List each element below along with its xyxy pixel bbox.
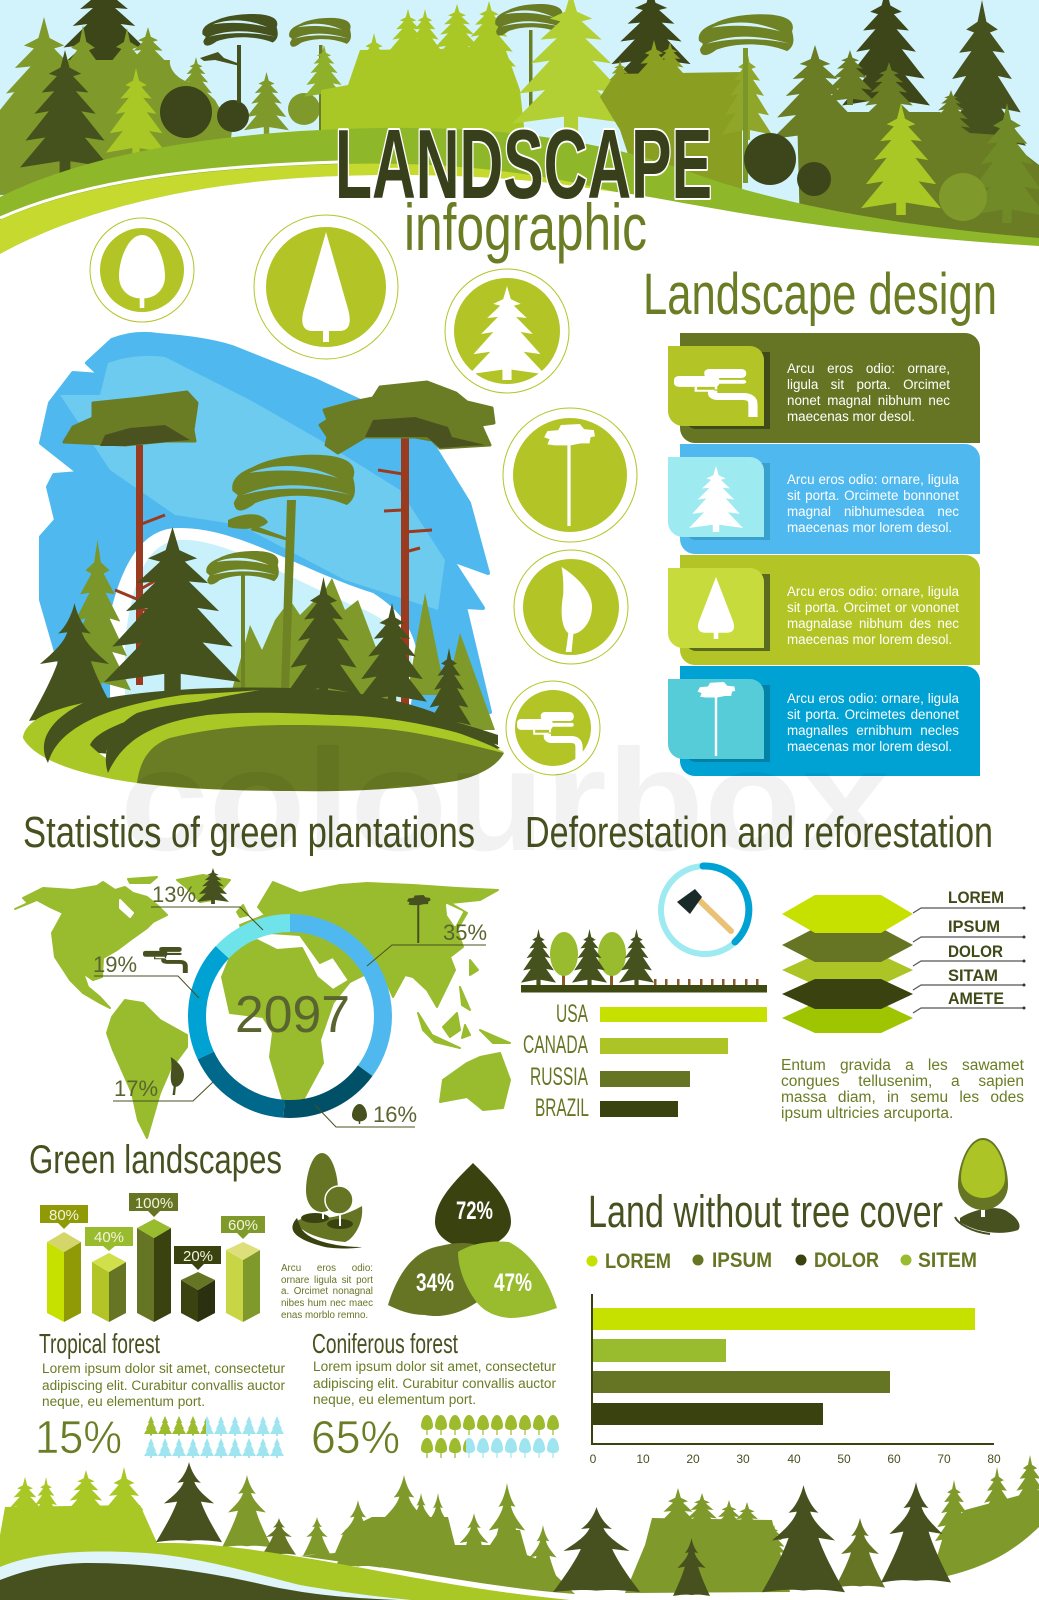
card: bonsai: maecenas mor desol.: [787, 409, 915, 424]
title: [335, 109, 712, 264]
card: bonsai: nonet magnal nibhum nec: [787, 393, 950, 408]
landscape illustration: [23, 334, 504, 791]
card: cone tree: maecenas mor lorem desol.: [787, 632, 952, 647]
card: tall pine: maecenas mor lorem desol.: [787, 739, 952, 754]
small paragraph: nibes hum nec maec: [281, 1298, 373, 1309]
panel: cards: [668, 333, 980, 776]
card: spruce: maecenas mor lorem desol.: [787, 520, 952, 535]
petal chart: 72%: [456, 1197, 493, 1225]
petal chart: 34%: [416, 1269, 454, 1297]
card: tall pine: Arcu eros odio: ornare, ligula: [787, 691, 959, 706]
horizontal bar chart: 60: [887, 1452, 901, 1466]
axe ring: [661, 866, 749, 954]
coniferous forest block: [311, 1328, 559, 1463]
hexagon stack: LOREM: [948, 888, 1004, 907]
country bar chart: CANADA: [523, 1031, 588, 1059]
country bar chart: [523, 1000, 767, 1122]
horizontal bar chart: 80: [987, 1452, 1001, 1466]
small paragraph: [281, 1263, 373, 1325]
country bar chart: RUSSIA: [530, 1063, 588, 1091]
donut callouts: 19%: [93, 952, 137, 977]
header forest scene: [0, 0, 1039, 300]
ground: [35, 687, 500, 763]
donut callouts: [93, 868, 487, 1127]
card: spruce: sit porta. Orcimete bonnonet: [787, 488, 959, 503]
small paragraph: enas morblo remno.: [281, 1310, 368, 1321]
foreground spruces: [104, 527, 241, 692]
donut callouts: 13%: [152, 882, 196, 907]
card: spruce: [668, 444, 980, 554]
heading: green landscapes: Green landscapes: [29, 1138, 282, 1182]
card: cone tree: Arcu eros odio: ornare, ligula: [787, 584, 959, 599]
horizontal bar chart: 20: [686, 1452, 700, 1466]
bar 40%: [85, 1227, 133, 1322]
footer forest scene: [0, 1455, 1039, 1600]
green hill: [0, 128, 1039, 262]
coniferous forest block: 65%: [311, 1411, 400, 1463]
horizontal bar chart: 50: [837, 1452, 851, 1466]
card: cone tree: [668, 555, 980, 665]
title: LANDSCAPE: [335, 109, 712, 219]
legend: [586, 1249, 977, 1273]
deforestation paragraph: congues tellusenim, a sapien: [781, 1073, 1024, 1090]
deforestation paragraph: massa diam, in semu les odes: [781, 1089, 1024, 1106]
coniferous forest block: Lorem ipsum dolor sit amet, consectetur: [313, 1359, 557, 1374]
bar 60%: [221, 1216, 265, 1322]
isometric bar chart: [40, 1193, 265, 1322]
icon: tall pine: [503, 408, 637, 542]
card: bonsai: [668, 333, 980, 443]
donut chart: [197, 923, 383, 1109]
bar 40%: 40%: [94, 1229, 124, 1246]
coniferous forest block: Coniferous forest: [312, 1328, 458, 1359]
bar 80%: [40, 1205, 88, 1322]
small paragraph: ornare ligula sit port: [281, 1275, 373, 1286]
small paragraph: Arcu eros odio:: [281, 1263, 373, 1274]
donut callouts: 16%: [373, 1102, 417, 1127]
petal chart: 47%: [494, 1269, 532, 1297]
icon: cone tree: [254, 215, 398, 359]
horizontal bar chart: 0: [590, 1452, 597, 1466]
back trees: [64, 540, 131, 700]
tropical forest block: 15%: [35, 1411, 122, 1463]
tropical forest block: Tropical forest: [39, 1328, 160, 1359]
deforestation paragraph: ipsum ultricies arcuporta.: [781, 1105, 953, 1122]
watermark: colourbox: [120, 719, 890, 881]
tree illustration: [292, 1153, 362, 1248]
horizontal bar chart: 10: [636, 1452, 650, 1466]
country bar chart: USA: [556, 1000, 588, 1028]
heading: statistics: Statistics of green plantations: [23, 808, 475, 857]
legend: DOLOR: [814, 1249, 879, 1272]
icon: spruce: [445, 269, 569, 393]
hexagon stack: IPSUM: [948, 917, 1000, 936]
tall pine left: [64, 392, 197, 685]
horizontal bar chart: 40: [787, 1452, 801, 1466]
country bar chart: BRAZIL: [535, 1094, 589, 1122]
bar 100%: 100%: [135, 1195, 173, 1212]
bar 20%: 20%: [183, 1248, 213, 1265]
legend: SITEM: [918, 1249, 977, 1272]
icon: oval tree: [90, 218, 194, 322]
card: bonsai: Arcu eros odio: ornare,: [787, 361, 950, 376]
bar 60%: 60%: [228, 1217, 258, 1234]
tropical forest block: Lorem ipsum dolor sit amet, consectetur: [42, 1361, 286, 1376]
tropical forest block: [35, 1328, 286, 1463]
donut chart: 2097: [235, 986, 350, 1044]
sky: [41, 334, 490, 712]
hexagon stack: SITAM: [948, 966, 998, 985]
hexagon stack: DOLOR: [948, 942, 1003, 961]
umbrella pines: [206, 455, 355, 690]
bar 80%: 80%: [49, 1207, 79, 1224]
small paragraph: a. Orcimet nonagnal: [281, 1286, 373, 1297]
donut callouts: 17%: [114, 1076, 158, 1101]
icon: egg tree: [955, 1138, 1020, 1234]
card: cone tree: sit porta. Orcimet or vononet: [787, 600, 959, 615]
title: infographic: [404, 190, 647, 264]
donut callouts: 35%: [443, 920, 487, 945]
bar 100%: [129, 1193, 178, 1322]
deforestation trees: [521, 929, 767, 992]
legend: LOREM: [605, 1250, 671, 1273]
card: bonsai: ligula sit porta. Orcimet: [787, 377, 950, 392]
icon circles: [90, 215, 637, 775]
hexagon stack: AMETE: [948, 989, 1004, 1008]
card: cone tree: magnalase nibhum des nec: [787, 616, 959, 631]
card: tall pine: [668, 666, 980, 776]
card: spruce: magnal nibhumesdea nec: [787, 504, 959, 519]
deforestation paragraph: [781, 1058, 1024, 1126]
legend: IPSUM: [712, 1249, 772, 1272]
tropical forest block: adipiscing elit. Curabitur convallis auctor: [42, 1378, 285, 1393]
coniferous forest block: adipiscing elit. Curabitur convallis auctor: [313, 1376, 556, 1391]
coniferous forest block: neque, eu elementum port.: [313, 1392, 476, 1407]
card: spruce: Arcu eros odio: ornare, ligula: [787, 472, 959, 487]
icon: bonsai: [506, 681, 600, 775]
tall pine right: [320, 382, 494, 717]
horizontal bar chart: [590, 1294, 1001, 1466]
icon: leaf tree: [514, 550, 628, 664]
card: tall pine: magnalles ernibhum necles: [787, 723, 959, 738]
bar 20%: [174, 1246, 221, 1322]
horizontal bar chart: 30: [736, 1452, 750, 1466]
horizontal bar chart: 70: [937, 1452, 951, 1466]
hexagon stack: [782, 888, 1026, 1033]
card: tall pine: sit porta. Orcimetes denonet: [787, 707, 959, 722]
petal chart: [388, 1163, 557, 1318]
tropical forest block: neque, eu elementum port.: [42, 1394, 205, 1409]
world map: [15, 875, 510, 1138]
